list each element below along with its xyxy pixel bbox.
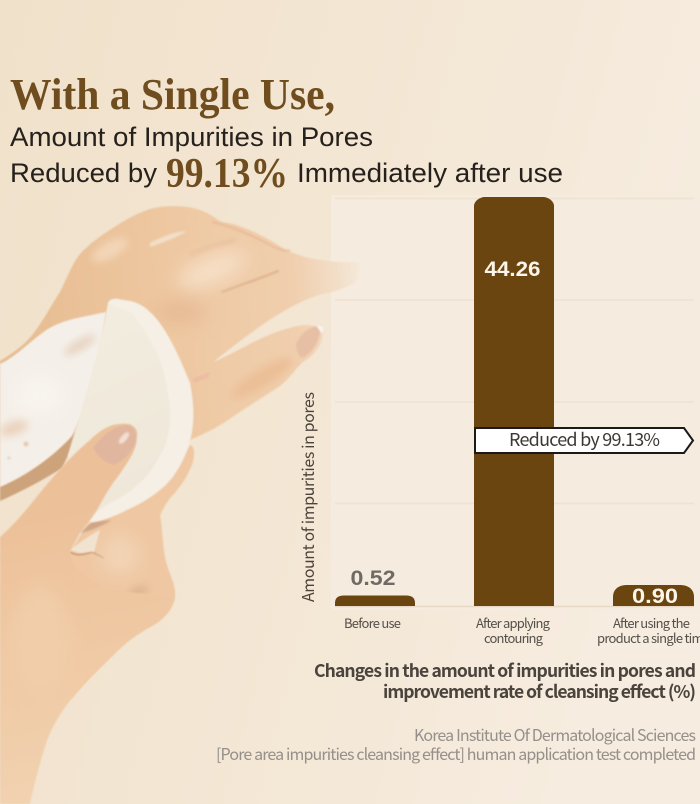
- callout arrow: reduced by 99.13%: Reduced by 99.13%: [509, 426, 660, 452]
- subtitle line 2: 99.13%: [166, 151, 288, 197]
- palm of lower hand: [30, 445, 194, 700]
- thumb nail: [93, 425, 136, 465]
- upper hand: [0, 206, 360, 501]
- bar: after single use: [613, 585, 694, 608]
- chart caption: Changes in the amount of impurities in pores and: [314, 658, 696, 683]
- y axis label: Amount of impurities in pores: [295, 392, 319, 602]
- bar chart: [295, 197, 700, 647]
- shadow beneath sponge: [80, 520, 112, 533]
- subtitle line 2: Immediately after use: [297, 158, 563, 188]
- bar: before use: 0.52: [350, 567, 396, 590]
- fingernail: [296, 326, 320, 358]
- gap between thumb and fingers: [70, 530, 100, 553]
- callout arrow: reduced by 99.13%: [475, 426, 693, 453]
- bar: after applying contouring: 44.26: [484, 258, 540, 281]
- sponge outer rim: [70, 299, 193, 522]
- grid lines: [335, 198, 694, 504]
- knuckle crease: [70, 552, 104, 558]
- chart caption: improvement rate of cleansing effect (%): [383, 679, 696, 704]
- title: [10, 70, 563, 197]
- category labels: [344, 613, 700, 647]
- bar: after single use: 0.90: [632, 585, 678, 608]
- chart panel background: [331, 195, 700, 610]
- category labels: After using the: [613, 613, 690, 632]
- subtitle line 2: [10, 151, 563, 197]
- knuckle and finger creases: [222, 271, 278, 292]
- subtitle line 1: Amount of Impurities in Pores: [10, 122, 373, 152]
- bar: after applying contouring: [474, 197, 554, 606]
- sponge inner face: [68, 303, 170, 514]
- illustration: hands with cleansing sponge: [0, 206, 360, 804]
- category labels: Before use: [344, 613, 401, 632]
- source note: [216, 722, 696, 765]
- finger gap: [150, 231, 187, 247]
- finger tip behind hand: [192, 372, 210, 383]
- source note: Korea Institute Of Dermatological Sciences: [414, 722, 696, 746]
- category labels: contouring: [484, 628, 544, 647]
- source note: [Pore area impurities cleansing effect] human application test completed: [216, 741, 696, 765]
- wrist under foam: [0, 430, 80, 501]
- sponge: [68, 299, 193, 522]
- foam on forearm: [0, 312, 106, 487]
- bar: before use: [335, 567, 415, 606]
- highlights on hand: [173, 244, 251, 296]
- category labels: After applying: [476, 613, 551, 632]
- heading: With a Single Use: With a Single Use,: [10, 70, 335, 119]
- chart caption: [314, 658, 696, 704]
- thumb and forearm: [0, 424, 175, 804]
- subtitle line 2: Reduced by: [10, 158, 157, 188]
